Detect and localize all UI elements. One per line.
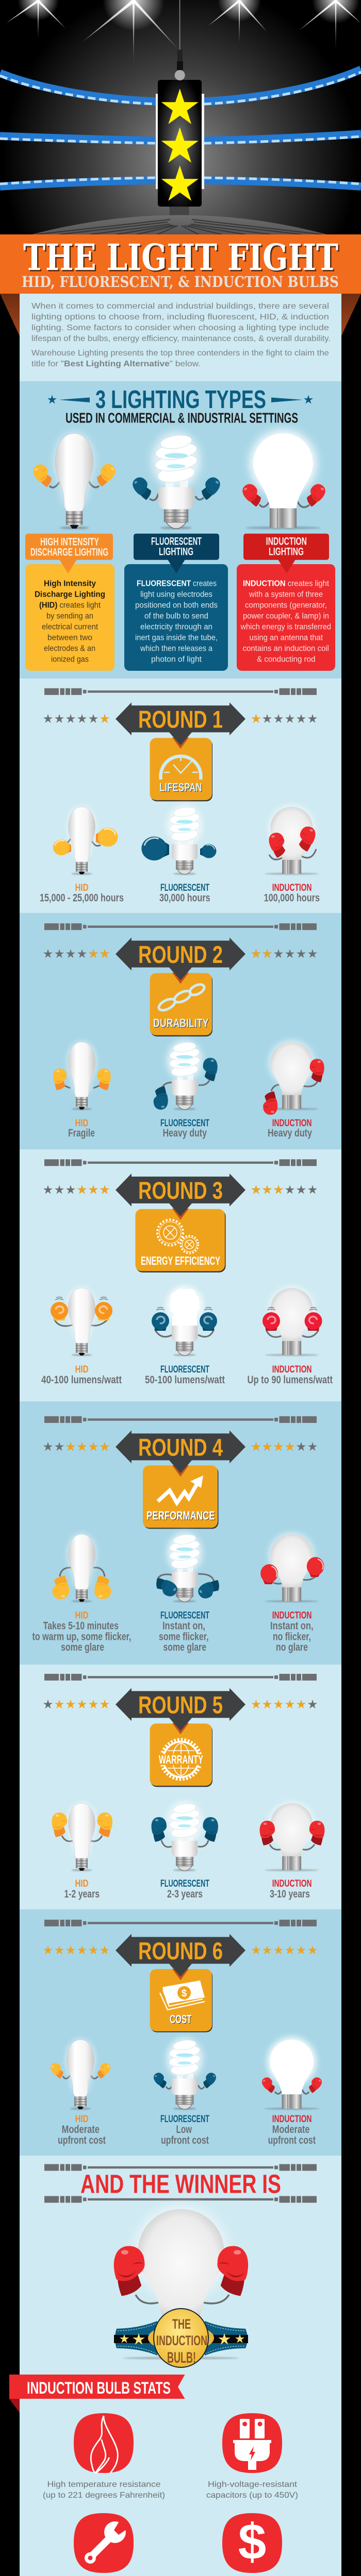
intro text: lighting options to choose from, including fluorescent, HID, & induction (31, 313, 329, 321)
round 4 results: Takes 5-10 minutes (43, 1620, 119, 1632)
round 4 results: no glare (276, 1641, 308, 1653)
round 5 header: ROUND 5 (138, 1691, 223, 1719)
card label: DURABILITY (153, 1016, 208, 1030)
heading: 3 LIGHTING TYPES (95, 386, 266, 414)
round 3 results: Up to 90 lumens/watt (248, 1374, 333, 1386)
section: round 4 performance (20, 1401, 341, 1665)
icon: money: $ (182, 1988, 187, 1999)
HID fighter round 4 (52, 1534, 111, 1602)
round 1 header: ROUND 1 (138, 706, 223, 733)
stat: savings: $ (238, 2513, 266, 2570)
round 6 results: Low (176, 2123, 192, 2136)
HID card: Discharge Lighting (35, 590, 105, 599)
card label: COST (170, 2012, 192, 2026)
fluorescent fighter round 3 (152, 1286, 217, 1356)
round 4 results: INDUCTION (272, 1611, 311, 1621)
HID card: by sending an (46, 612, 93, 620)
round 4 results: some glare (163, 1641, 206, 1653)
icon: warranty seal (157, 1739, 205, 1780)
induction fighter round 5 (260, 1802, 324, 1871)
round 1 header (43, 688, 317, 801)
round 4 results: Instant on, (270, 1620, 314, 1632)
stat: temperature: (up to 221 degrees Fahrenheit) (43, 2491, 165, 2500)
fluorescent card (124, 534, 228, 671)
round 5 results: INDUCTION (272, 1878, 311, 1889)
stat: maintenance (74, 2513, 134, 2576)
stats ribbon (9, 2375, 185, 2413)
round 4 results: to warm up, some flicker, (32, 1630, 131, 1642)
card label: PERFORMANCE (146, 1509, 215, 1522)
intro panel (20, 294, 341, 381)
round 4 results: FLUORESCENT (160, 1611, 209, 1621)
induction card: contains an induction coil (242, 644, 329, 653)
round 6 header: ROUND 6 (138, 1937, 223, 1964)
induction card: LIGHTING (269, 546, 304, 558)
microphone (175, 0, 185, 80)
panel: winner and stats (9, 2156, 341, 2576)
icon: money (160, 1980, 205, 2010)
round 5 results (64, 1878, 311, 1900)
fluorescent fighter round 1 (141, 805, 216, 875)
HID card: electrodes & an (44, 644, 95, 653)
spotlights (6, 0, 361, 68)
round 5 results: FLUORESCENT (160, 1878, 209, 1889)
fluorescent card: of the bulb to send (144, 612, 208, 620)
fluorescent card: photon of light (151, 655, 202, 664)
hero: boxing ring (0, 0, 361, 337)
winner heading (44, 2164, 317, 2203)
round 3 results: 50-100 lumens/watt (145, 1374, 225, 1386)
fluorescent fighter round 4 (152, 1532, 223, 1602)
round 2 results (68, 1118, 312, 1139)
induction card: components (generator, (245, 601, 327, 610)
stats ribbon: INDUCTION BULB STATS (27, 2379, 171, 2397)
stat: voltage: High-voltage-resistant (208, 2480, 298, 2489)
section: round 5 warranty (20, 1665, 341, 1909)
HID card: electrical current (42, 622, 99, 631)
round 5 header (43, 1674, 317, 1787)
intro text: title for " Best Lighting Alternative " below. (31, 360, 201, 368)
round 1 results: INDUCTION (272, 883, 311, 893)
HID card: (HID) creates light (39, 601, 101, 610)
fluorescent card: FLUORESCENT creates (137, 579, 217, 588)
round 3 header: ROUND 3 (138, 1177, 223, 1204)
round 2 results: FLUORESCENT (160, 1118, 209, 1129)
icon: warranty seal: WARRANTY (159, 1753, 203, 1766)
round 5 results: 2-3 years (167, 1888, 203, 1900)
championship belt: THE (172, 2316, 191, 2332)
card label: LIFESPAN (159, 781, 202, 794)
round 5 results: 1-2 years (64, 1888, 100, 1900)
section: round 3 energy efficiency (20, 1149, 341, 1401)
round 6 results: HID (75, 2114, 89, 2125)
panel: 3 lighting types (20, 381, 341, 679)
round 6 results: Moderate (272, 2123, 310, 2136)
round 1 results: FLUORESCENT (160, 883, 209, 893)
round 4 results (32, 1611, 314, 1653)
fluorescent fighter (130, 432, 223, 529)
round 5 results: 3-10 years (270, 1888, 310, 1900)
fluorescent card: which then releases a (140, 644, 212, 653)
round 2 header (43, 923, 317, 1037)
induction card: which energy is transferred (240, 622, 331, 631)
round 6 results: upfront cost (58, 2134, 106, 2146)
induction card: power coupler, & lamp) in (243, 612, 329, 620)
icon: rising arrow (158, 1476, 203, 1503)
induction card: INDUCTION creates light (243, 579, 330, 588)
ring post sign with stars (156, 80, 204, 215)
round 6 results: upfront cost (268, 2134, 316, 2146)
round 4 header (43, 1416, 317, 1529)
round 1 results: 30,000 hours (159, 891, 210, 904)
HID fighter (30, 433, 118, 529)
round 2 results: Heavy duty (268, 1127, 312, 1139)
HID fighter round 5 (52, 1803, 112, 1871)
card label: ENERGY EFFICIENCY (141, 1254, 220, 1267)
HID card (25, 534, 114, 671)
heading ornament (47, 395, 313, 404)
fluorescent fighter round 2 (154, 1040, 218, 1110)
section: round 2 durability (20, 913, 341, 1149)
induction card: & conducting rod (257, 655, 316, 664)
ring floor (32, 215, 327, 234)
intro text (31, 302, 331, 368)
fluorescent fighter round 6 (152, 2038, 218, 2110)
stat: voltage (206, 2413, 298, 2500)
round 2 header: ROUND 2 (138, 941, 223, 968)
round 3 header (43, 1159, 317, 1273)
induction card: with a system of three (249, 590, 323, 599)
winner heading: AND THE WINNER IS (80, 2170, 281, 2199)
induction fighter (240, 430, 328, 529)
intro text: lighting. Some factors to consider when choosing a lighting type include (31, 324, 329, 332)
round 1 results (40, 883, 320, 904)
round 2 results: INDUCTION (272, 1118, 311, 1129)
round 1 results: 100,000 hours (264, 891, 320, 904)
round 6 results: upfront cost (161, 2134, 209, 2146)
induction card: INDUCTION (266, 536, 307, 548)
icon: gears (157, 1219, 198, 1253)
round 4 results: no flicker, (273, 1630, 311, 1642)
fluorescent fighter round 5 (152, 1801, 218, 1871)
induction card (237, 534, 335, 671)
induction fighter round 6 (260, 2037, 324, 2110)
ribbon folds top (0, 294, 361, 336)
stat: temperature: High temperature resistance (47, 2480, 161, 2489)
stat: voltage: capacitors (up to 450V) (206, 2491, 298, 2500)
ring ropes (0, 70, 361, 187)
HID card: High Intensity (44, 579, 96, 588)
round 6 results: Moderate (62, 2123, 100, 2136)
round 2 results: Heavy duty (163, 1127, 207, 1139)
round 4 results: some glare (61, 1641, 104, 1653)
HID card: DISCHARGE LIGHTING (30, 547, 108, 558)
orange title banner (0, 234, 361, 294)
championship belt (114, 2309, 248, 2367)
round 4 results: some flicker, (159, 1630, 208, 1642)
fluorescent card: electricity through an (140, 622, 212, 631)
fluorescent card: positioned on both ends (135, 601, 218, 610)
round 3 results: FLUORESCENT (160, 1364, 209, 1375)
induction fighter round 4 (260, 1533, 324, 1602)
induction fighter round 1 (265, 805, 319, 875)
HID card: HIGH INTENSITY (40, 536, 99, 548)
induction fighter round 2 (263, 1041, 324, 1115)
round 6 results (58, 2114, 316, 2146)
icon: clock (161, 756, 201, 779)
round 3 results: INDUCTION (272, 1364, 311, 1375)
fluorescent card: FLUORESCENT (151, 536, 202, 548)
HID fighter round 6 (48, 2040, 112, 2110)
round 1 results: 15,000 - 25,000 hours (40, 891, 124, 904)
section: round 1 lifespan (20, 679, 341, 913)
icon: chain (157, 982, 206, 1012)
round 3 results: 40-100 lumens/watt (41, 1374, 122, 1386)
section: round 6 cost (20, 1909, 341, 2156)
round 3 results (41, 1364, 333, 1386)
round 2 results: HID (75, 1118, 89, 1129)
round 6 results: INDUCTION (272, 2114, 311, 2125)
fluorescent card: inert gas inside the tube, (135, 633, 218, 642)
round 4 results: HID (75, 1611, 89, 1621)
HID card: between two (47, 633, 92, 642)
intro text: Warehouse Lighting presents the top three contenders in the fight to claim the (31, 349, 329, 358)
round 6 header (43, 1920, 317, 2032)
fluorescent card: LIGHTING (159, 546, 193, 558)
stat: savings (185, 2513, 320, 2576)
championship belt: BULB! (167, 2349, 196, 2366)
round 3 results: HID (75, 1364, 89, 1375)
intro text: When it comes to commercial and industrial buildings, there are several (31, 302, 329, 311)
round 4 results: Instant on, (162, 1620, 205, 1632)
championship belt: INDUCTION (156, 2333, 207, 2348)
stat: temperature (43, 2413, 165, 2500)
HID card: ionized gas (51, 655, 89, 664)
fluorescent card: light using electrodes (140, 590, 212, 599)
round 6 results: FLUORESCENT (160, 2114, 209, 2125)
HID fighter round 2 (53, 1042, 111, 1110)
round 1 results: HID (75, 883, 89, 893)
HID fighter round 1 (53, 807, 118, 875)
winning induction bulb (114, 2206, 248, 2348)
round 5 results: HID (75, 1878, 89, 1889)
HID fighter round 3 (51, 1288, 112, 1356)
intro text: lifespan of the bulbs, energy efficiency, maintenance costs, & overall durability. (31, 334, 331, 343)
round 4 header: ROUND 4 (138, 1434, 223, 1461)
induction fighter round 3 (262, 1286, 322, 1356)
induction card: using an antenna that (250, 633, 323, 642)
round 2 results: Fragile (68, 1127, 95, 1139)
